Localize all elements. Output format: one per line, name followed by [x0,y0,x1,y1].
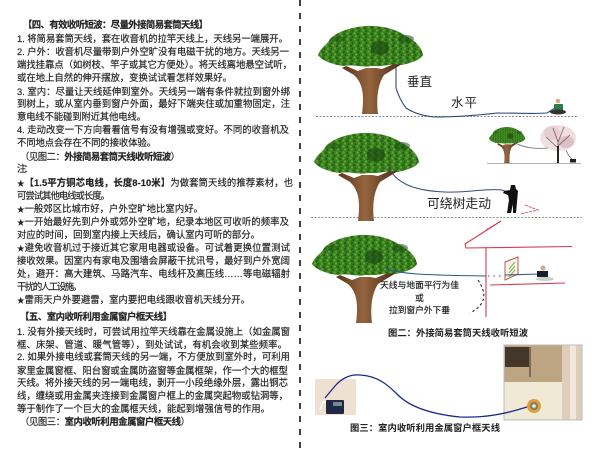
text block: section five steps: 框、床架、管道、暖气管等），到处试试，有机会收到某些频率。 [17,339,287,350]
house outline [465,221,572,317]
text block: section four steps: 意电线不能碰到附近其他电线。 [17,111,146,122]
text block: section four steps: 3. 室内：尽量让天线延伸到室外。天线另一端有条件就拉到窗外绑 [17,86,290,97]
text block: notes: 对应的时间，回到室内接上天线后，确认室内可听的部分。 [17,229,260,240]
text block: section four steps: （见图二：外接简易套筒天线收听短波） [20,151,180,162]
label: vertical: 垂直 [407,75,432,89]
panel: section four text [17,19,293,305]
icon: large tree [312,235,417,323]
heading: section five: 【五、室内收听利用金属窗户框天线】 [20,311,172,322]
panel: figure 2 illustrations [311,26,582,338]
text block: section four steps: 不同地点会存在不同的接收体验。 [17,137,156,148]
icon: small tree [489,127,525,163]
text block: notes [17,163,293,305]
antenna wire [389,168,510,193]
antenna wire [396,65,555,117]
icon: person silhouette [503,185,518,213]
label: antenna guidance: 天线与地面平行为佳 [380,279,459,290]
text block: section five steps: 1. 没有外接天线时，可尝试用拉竿天线靠在金属设施上（如金属窗 [17,326,290,337]
label: antenna guidance: 或 [415,292,424,303]
icon: large tree [314,133,419,221]
antenna wire [325,375,527,417]
icon: orange clamp ring [527,399,541,413]
text block: section four steps: 1. 将简易套筒天线，套在收音机的拉竿天线上，天线另一端展开。 [17,33,288,44]
text block: notes: ★避免收音机过于接近其它家用电器或设备。可试着更换位置测试 [17,242,291,253]
text block: section four steps: 端找挂靠点（如树枝、竿子或其它方便处）。将天线离地悬空试听， [17,59,292,70]
text block: section five steps: 2. 如果外接电线或套筒天线的另一端，不方便放到室外时，可利用 [17,351,290,362]
panel: figure 3 [315,345,582,433]
hanging wire dotted [470,280,484,313]
icon: window [505,257,518,280]
diagram: indoor to outdoor antenna [312,221,572,323]
text block: section four steps [17,33,292,162]
text block: notes: ★一开始最好先到户外或郊外空旷地，纪录本地区可收听的频率及 [17,216,290,227]
antenna wire [386,268,540,276]
ground line [311,216,582,218]
diagram: walking around a tree [311,125,582,230]
text block: section five steps: 家里金属窗框、阳台窗或金属防盗窗等金属框架，作一个大的框型 [17,365,288,376]
text block: notes: ★雷雨天户外要避雷，室内要把电线跟收音机天线分开。 [17,294,250,305]
text block: notes: 处，避开：高大建筑、马路汽车、电线杆及高压线……等电磁辐射 [17,268,290,279]
small ground line [487,162,581,164]
photo: radio [315,379,356,415]
diagram: vertical and horizontal antenna [316,26,577,117]
text block: section four steps: 4. 走动改变一下方向看看信号有没有增强或变好。不同的收音机及 [17,124,290,135]
label: antenna guidance: 拉到窗户外下垂 [389,304,450,315]
wire through wall [488,275,505,277]
text block: section four steps: 到树上，或从室内垂到窗户外面，最好下端夹住或加重物固定，注 [17,98,290,109]
icon: large tree [318,26,423,114]
text block: notes: 接收效果。因室内有家电及围墙会屏蔽干扰讯号，最好到户外宽阔 [17,255,290,266]
icon: person with radio [550,99,566,114]
text block: section four steps: 或在地上自然的伸开摆放，变换试试看怎样效果好。 [17,72,232,83]
icon: blossom tree [540,125,576,163]
text block: section five steps: 等于制作了一个巨大的金属框天线，能起到增强信号的作用。 [17,403,270,414]
caption: figure 2: 图二：外接简易套筒天线收听短波 [388,327,529,338]
text block: notes: ★【1.5平方铜芯电线，长度8-10米】为做套筒天线的推荐素材，也 [17,177,293,188]
icon: person with radio [536,266,554,281]
panel: section five text [17,311,290,427]
text block: section five steps: 线，缠绕或用金属夹连接到金属窗户框上的金属突起物或钻洞等， [17,390,288,401]
text block: section five steps: （见图三：室内收听利用金属窗户框天线） [20,416,190,427]
text block: notes: 注： [17,163,33,174]
label: horizontal: 水平 [451,96,477,110]
label: can walk around tree: 可绕树走动 [427,196,491,211]
ground line [316,116,577,118]
text block: section five steps: 天线。将外接天线的另一端电线，剥开一小段绝缘外层，露出铜芯 [17,377,288,388]
photo: window frame [504,345,582,420]
small antenna wire [515,143,573,160]
divider line [299,0,301,449]
text block: section five steps [17,326,290,427]
text block: notes: 可尝试其他电线或长度。 [17,190,110,201]
heading: section four: 【四、有效收听短波：尽量外接简易套筒天线】 [23,19,208,30]
arrows: red walking direction [486,205,538,230]
text block: notes: ★一般郊区比城市好，户外空旷地比室内好。 [17,203,203,214]
text block: notes: 干扰的人工设施。 [17,281,82,292]
text block: section four steps: 2. 户外：收音机尽量带到户外空旷没有电磁干扰的地方。天线另一 [17,46,289,57]
icon: small radio [570,159,576,162]
label: antenna guidance [380,279,459,315]
caption: figure 3: 图三：室内收听利用金属窗户框天线 [350,422,501,433]
